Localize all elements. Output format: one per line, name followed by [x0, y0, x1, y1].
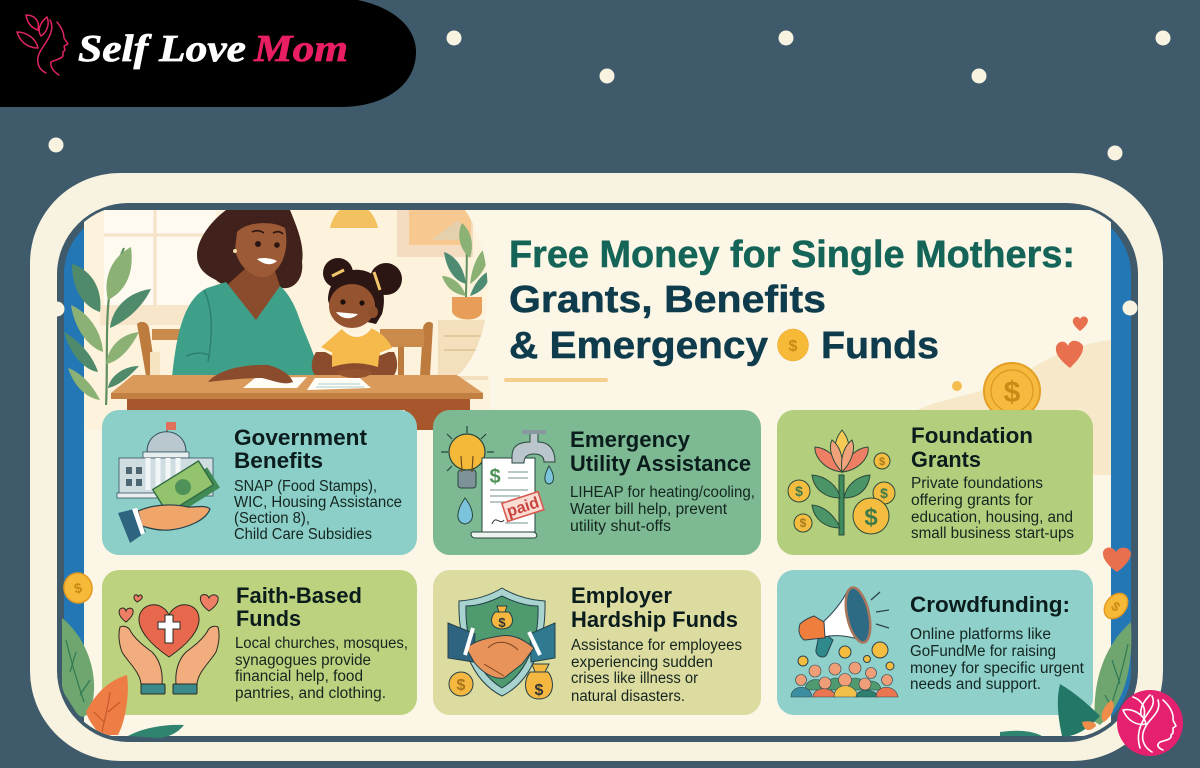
face details: [233, 231, 283, 264]
title: Free Money for Single Mothers:: [509, 234, 1075, 276]
right coin: $: [1108, 598, 1124, 615]
table: [111, 375, 483, 430]
coin behind foundation card: [983, 362, 1041, 410]
body text: WIC, Housing Assistance: [234, 494, 402, 511]
icon: shield and handshake: $: [498, 615, 506, 630]
body text: money for specific urgent: [910, 660, 1085, 677]
heading: Grants: [911, 447, 981, 472]
neck: [228, 269, 280, 320]
heading: Hardship Funds: [571, 607, 738, 632]
right heart: [1103, 548, 1131, 572]
icon: heart and hands: [119, 595, 219, 694]
icon: flower with coins: $: [880, 485, 888, 501]
heading: Benefits: [234, 448, 323, 473]
body text: [234, 478, 402, 543]
dresser: [438, 320, 488, 380]
potted plant: [442, 223, 490, 320]
heading: [236, 583, 362, 631]
papers: [243, 377, 371, 390]
icon: flower with coins: $: [795, 483, 803, 499]
inner dark frame with blue side strips: [60, 206, 1134, 738]
mother: [172, 210, 316, 378]
body text: crises like illness or: [571, 670, 698, 687]
card: faith-based funds: [102, 570, 417, 715]
background dots: [48, 30, 1170, 160]
body text: LIHEAP for heating/cooling,: [570, 484, 755, 501]
wall picture: [397, 205, 473, 257]
pink logo badge: [1117, 690, 1183, 756]
icon: flower with coins: [788, 430, 895, 535]
inner content area: [61, 205, 1132, 736]
buns: [323, 258, 353, 288]
body text: SNAP (Food Stamps),: [234, 478, 377, 495]
title: [509, 234, 1075, 367]
face: [235, 223, 286, 277]
heading: [234, 425, 368, 473]
hair: [328, 270, 384, 324]
heading: [571, 583, 738, 632]
icon: flower with coins: $: [800, 516, 807, 530]
heading: Foundation: [911, 423, 1033, 448]
body text: [910, 626, 1085, 693]
heading: Employer: [571, 583, 672, 608]
icon: flower with coins: $: [864, 504, 878, 531]
heading: [570, 427, 751, 476]
left plant: [64, 247, 151, 405]
heading: Funds: [236, 606, 301, 631]
heading: Government: [234, 425, 368, 450]
left coin: $: [72, 579, 84, 597]
left coin: [63, 572, 93, 604]
body text: small business start-ups: [911, 525, 1074, 542]
heading: Utility Assistance: [570, 451, 751, 476]
icon: shield and handshake: $: [535, 682, 544, 699]
hearts near title: [1056, 316, 1088, 368]
body text: pantries, and clothing.: [235, 685, 386, 702]
green top: [172, 282, 316, 378]
body text: (Section 8),: [234, 510, 310, 527]
body text: Online platforms like: [910, 626, 1051, 643]
illustration: mother and daughter: [84, 205, 494, 430]
title underline: [504, 378, 608, 382]
sand blob decoration: [915, 340, 1111, 475]
cream panel: [84, 210, 1111, 736]
lower right leaves: [1000, 622, 1131, 736]
face: [329, 284, 375, 328]
icon: megaphone and crowd: [791, 585, 898, 697]
body text: Local churches, mosques,: [235, 635, 408, 652]
arms: [312, 352, 398, 375]
card: crowdfunding: [777, 570, 1093, 715]
icon: shield and handshake: [448, 588, 555, 699]
body text: Water bill help, prevent: [570, 501, 728, 518]
logo wordmark: Mom: [253, 28, 348, 70]
card: foundation grants: [777, 410, 1093, 555]
title: Funds: [821, 325, 939, 367]
icon: shield and handshake: $: [457, 677, 466, 694]
right coin: [1104, 592, 1128, 620]
coin behind foundation card: $: [1004, 376, 1021, 409]
logo icon: [17, 15, 68, 75]
body text: needs and support.: [910, 676, 1041, 693]
body text: education, housing, and: [911, 509, 1073, 526]
card: emergency utility assistance: [433, 410, 761, 555]
body text: [570, 484, 755, 535]
body text: Private foundations: [911, 475, 1043, 492]
chairs: [137, 322, 433, 376]
title: & Emergency: [509, 325, 768, 367]
heading: [911, 423, 1033, 472]
title: Grants, Benefits: [509, 279, 826, 321]
logo wordmark: Self Love: [78, 28, 246, 70]
ceiling lamp: [330, 210, 378, 228]
badge icon: [1123, 695, 1176, 752]
icon: bulb faucet and paid bill: paid: [505, 494, 541, 521]
heading: Crowdfunding:: [910, 592, 1070, 617]
card: government benefits: [102, 410, 417, 555]
icon: capitol and money: [117, 422, 220, 543]
body text: Assistance for employees: [571, 637, 742, 654]
icon: flower with coins: $: [879, 456, 885, 468]
title coin icon: $: [789, 338, 798, 355]
body text: offering grants for: [911, 492, 1033, 509]
body text: experiencing sudden: [571, 654, 713, 671]
hair back: [197, 210, 303, 288]
body text: GoFundMe for raising: [910, 643, 1056, 660]
body text: financial help, food: [235, 668, 363, 685]
yellow shirt: [320, 328, 393, 367]
mother's forearm and hand: [208, 365, 293, 383]
small gold dot: [952, 381, 962, 391]
logo banner: [0, 0, 416, 107]
heading: Emergency: [570, 427, 691, 452]
frame dots on border: [50, 300, 1138, 316]
body text: [571, 637, 742, 705]
outer cream frame: [30, 173, 1163, 761]
daughter's hands: [336, 369, 372, 378]
icon: bulb faucet and paid bill: $: [489, 466, 501, 488]
heading: Faith-Based: [236, 583, 362, 608]
body text: [911, 475, 1074, 542]
body text: [235, 635, 408, 702]
body text: natural disasters.: [571, 688, 685, 705]
lower left leaves: [62, 618, 184, 738]
window: [100, 210, 220, 325]
body text: Child Care Subsidies: [234, 526, 372, 543]
card: employer hardship funds: [433, 570, 761, 715]
body text: synagogues provide: [235, 652, 371, 669]
foreground leaves clipped to frame: [62, 618, 1131, 738]
wall: [84, 210, 494, 430]
icon: bulb faucet and paid bill: [441, 426, 555, 538]
title coin icon: [778, 329, 808, 361]
daughter: [312, 258, 402, 378]
body text: utility shut-offs: [570, 518, 671, 535]
